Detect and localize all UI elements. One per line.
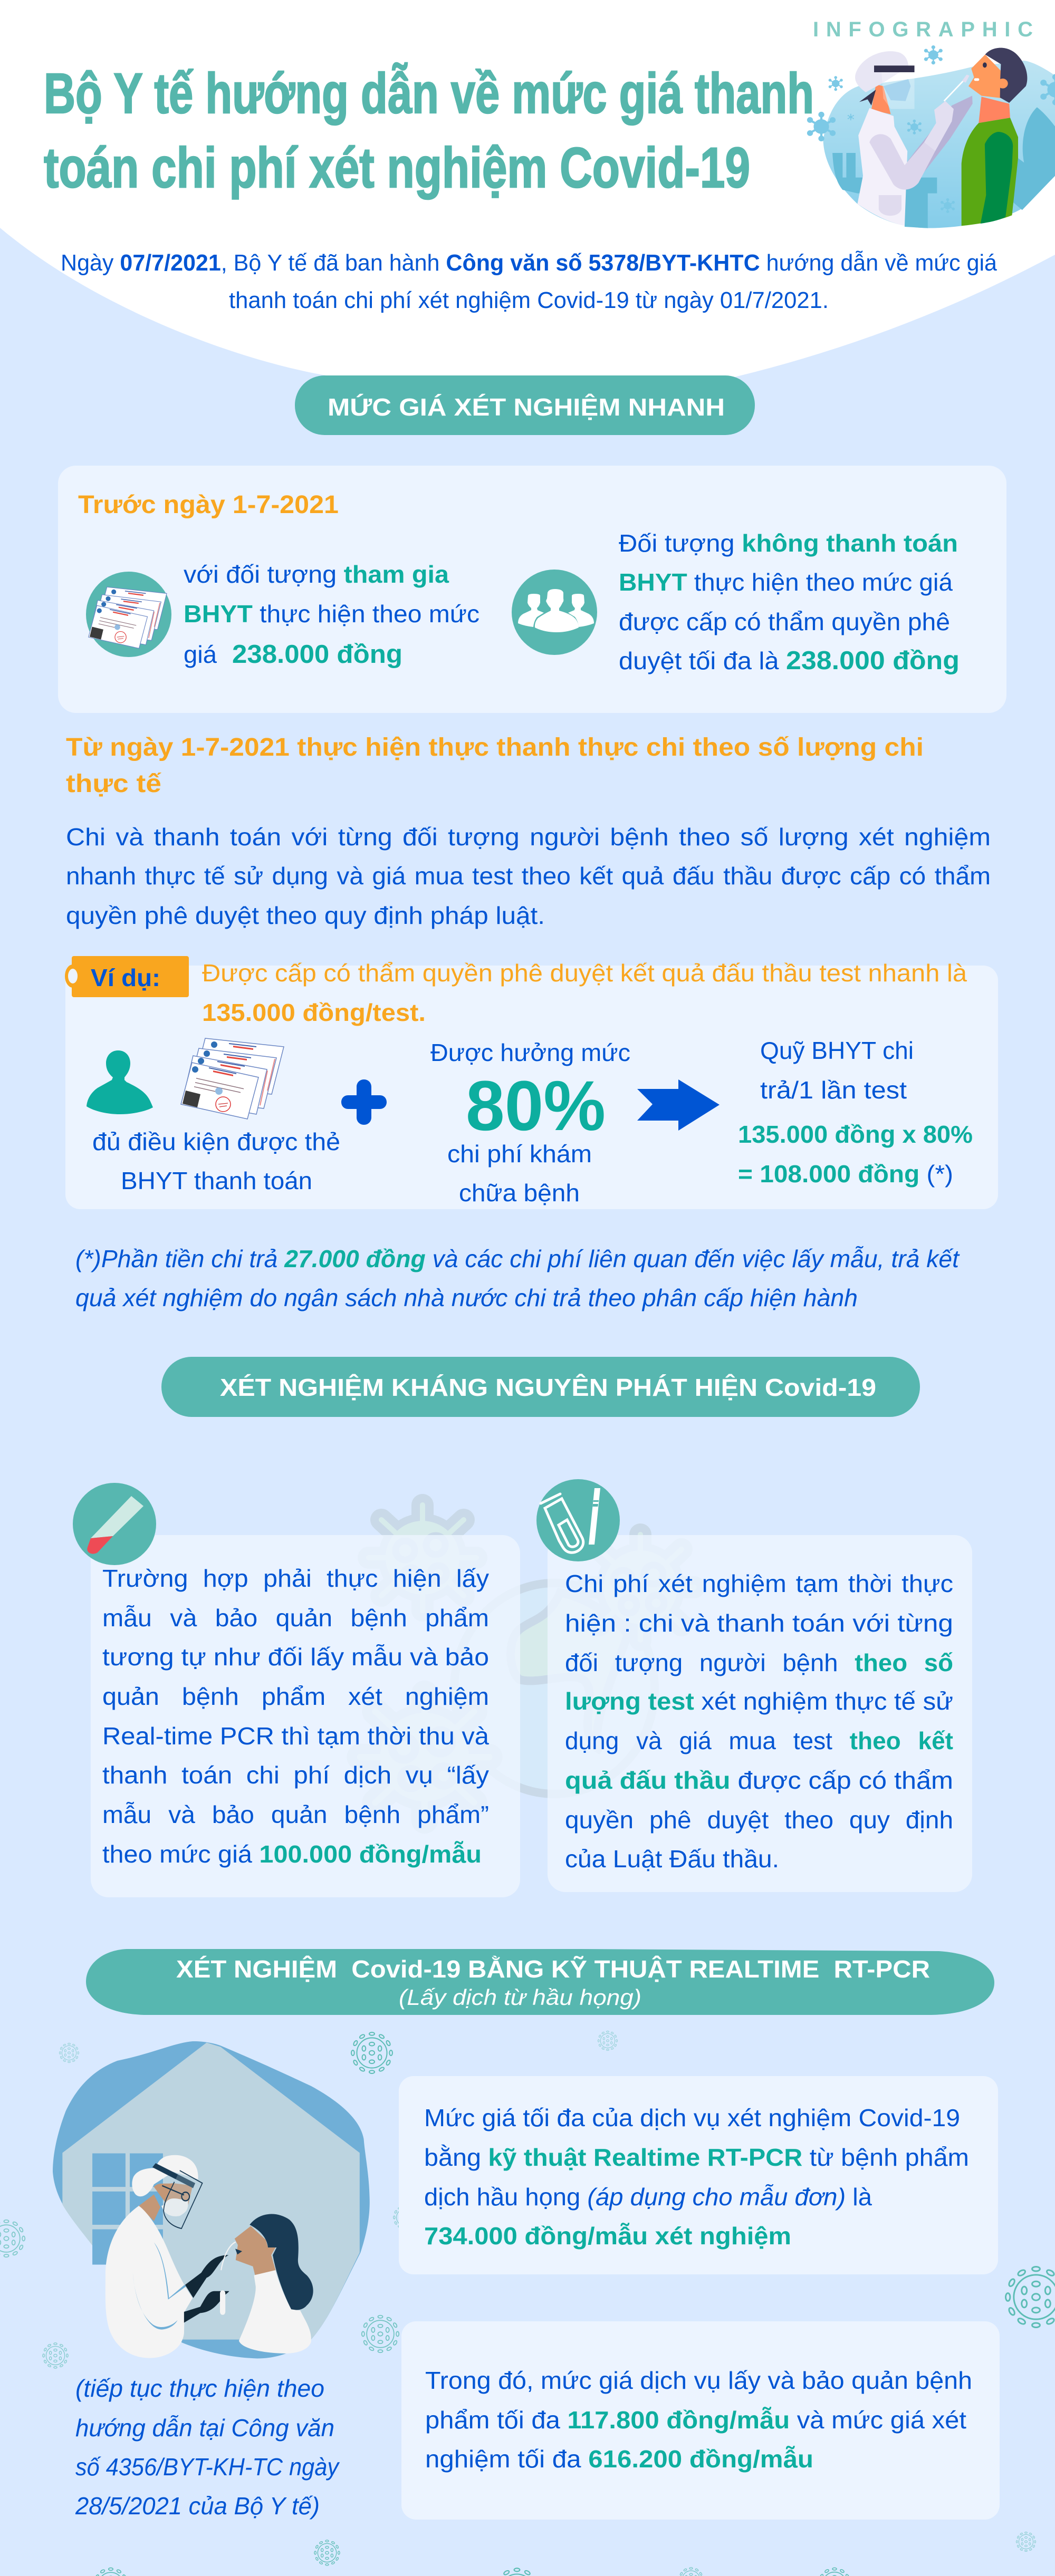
text: sampling cost: thanh toán chi phí dịch vụ “lấy	[102, 1761, 489, 1789]
text: insured patients: với đối tượng tham gia	[184, 561, 449, 588]
text: insured patients	[184, 561, 479, 669]
text: eligible card holder: đủ điều kiện được thẻ	[92, 1128, 340, 1155]
text: uninsured patients: được cấp có thẩm quyền phê	[619, 608, 950, 635]
text: fund pays: Quỹ BHYT chi	[760, 1037, 914, 1064]
text: benefit 80 percent: 80%	[466, 1067, 606, 1145]
arrow	[637, 1079, 720, 1131]
text: fund pays: 135.000 đồng x 80%	[738, 1121, 973, 1148]
text: sampling cost: mẫu và bảo quản bệnh phẩm”	[102, 1801, 489, 1828]
text: temporary test cost: Chi phí xét nghiệm tạm thời thực	[565, 1570, 953, 1597]
icon: blood test tube	[73, 1483, 156, 1565]
faded virus and flask background	[360, 1505, 694, 1820]
text: insured patients: 238.000 đồng	[232, 640, 402, 669]
paragraph: payment rule: nhanh thực tế sử dụng và giá mua test theo kết quả đấu thầu được cấp có thẩm	[66, 862, 991, 890]
text: temporary test cost: hiện : chi và thanh toán với từng	[565, 1609, 953, 1637]
heading pill: realtime RT-PCR: XÉT NGHIỆM Covid-19 BẰNG KỸ THUẬT REALTIME RT-PCR	[176, 1955, 930, 1983]
footnote: (*)Phần tiền chi trả 27.000 đồng và các chi phí liên quan đến việc lấy mẫu, trả kết	[75, 1245, 960, 1272]
text: fund pays: = 108.000 đồng (*)	[738, 1160, 953, 1188]
text: uninsured patients	[619, 529, 960, 675]
panel: before 1-7-2021	[58, 466, 1006, 713]
text: sampling cost: theo mức giá 100.000 đồng/mẫu	[102, 1840, 482, 1868]
heading pill: antigen test	[161, 1357, 920, 1417]
panel: price breakdown	[401, 2321, 1000, 2520]
heading: from 1-7-2021: thực tế	[66, 770, 161, 798]
footnote: quả xét nghiệm do ngân sách nhà nước chi trả theo phân cấp hiện hành	[75, 1284, 858, 1311]
icon: group of people	[512, 570, 597, 655]
text: fund pays: trả/1 lần test	[760, 1076, 907, 1104]
text: temporary test cost: dụng và giá mua test theo kết	[565, 1727, 953, 1754]
panel: left antigen card	[91, 1535, 520, 1897]
text: temporary test cost: quyền phê duyệt theo quy định	[565, 1806, 953, 1834]
text: eligible card holder	[92, 1128, 340, 1194]
intro text	[61, 250, 998, 313]
text: temporary test cost: của Luật Đấu thầu.	[565, 1845, 779, 1873]
text: sampling cost	[102, 1565, 489, 1868]
icon: insurance cards	[86, 572, 171, 657]
text: fund pays	[738, 1037, 973, 1188]
text: uninsured patients: Đối tượng không thanh toán	[619, 529, 958, 557]
panel: price breakdown: nghiệm tối đa 616.200 đồng/mẫu	[425, 2445, 813, 2473]
text: temporary test cost	[565, 1570, 953, 1873]
title: Bộ Y tế hướng dẫn về mức giá thanh	[44, 61, 814, 125]
text: example statement: 135.000 đồng/test.	[202, 999, 426, 1026]
panel: right antigen card	[548, 1535, 972, 1892]
panel: max price	[399, 2076, 998, 2274]
note: continue following document: hướng dẫn tại Công văn	[75, 2414, 334, 2442]
heading: before date: Trước ngày 1-7-2021	[78, 491, 339, 519]
text: benefit 80 percent: chữa bệnh	[459, 1179, 580, 1207]
text: sampling cost: mẫu và bảo quản bệnh phẩm	[102, 1604, 489, 1632]
panel: max price: Mức giá tối đa của dịch vụ xét nghiệm Covid-19	[424, 2104, 960, 2131]
text: eligible card holder: BHYT thanh toán	[121, 1167, 312, 1194]
text: uninsured patients: BHYT thực hiện theo mức giá	[619, 568, 953, 596]
tag: example label: Ví dụ:	[91, 964, 160, 991]
text: benefit 80 percent: Được hưởng mức	[430, 1039, 630, 1066]
text: insured patients: giá	[184, 641, 217, 668]
text: sampling cost: tương tự như đối lấy mẫu và bảo	[102, 1643, 489, 1671]
text: example statement: Được cấp có thẩm quyền phê duyệt kết quả đấu thầu test nhanh là	[202, 959, 967, 987]
heading pill: realtime RT-PCR: (Lấy dịch từ hầu họng)	[399, 1985, 641, 2010]
icon: person	[87, 1050, 153, 1114]
illustration: home sampling	[53, 2041, 370, 2359]
text: benefit 80 percent	[430, 1039, 630, 1207]
text: sampling cost: quản bệnh phẩm xét nghiệm	[102, 1683, 489, 1710]
paragraph: payment rule: Chi và thanh toán với từng đối tượng người bệnh theo số lượng xét nghiệm	[66, 823, 991, 851]
icon: swab tube and strip	[536, 1479, 620, 1561]
title: toán chi phí xét nghiệm Covid-19	[44, 136, 750, 199]
panel: price breakdown: Trong đó, mức giá dịch vụ lấy và bảo quản bệnh	[425, 2367, 972, 2394]
icon: insurance cards	[181, 1038, 284, 1119]
panel: example	[65, 956, 998, 1209]
tag: example label	[65, 956, 189, 997]
heading: from 1-7-2021	[66, 734, 924, 798]
heading: from 1-7-2021: Từ ngày 1-7-2021 thực hiện thực thanh thực chi theo số lượng chi	[66, 734, 924, 761]
footnote	[75, 1245, 960, 1311]
heading pill: antigen test: XÉT NGHIỆM KHÁNG NGUYÊN PHÁT HIỆN Covid-19	[220, 1374, 876, 1401]
header white arc background	[0, 0, 1055, 398]
heading pill: realtime RT-PCR	[86, 1949, 994, 2015]
paragraph: payment rule	[66, 823, 991, 929]
decorative viruses	[0, 2031, 1055, 2576]
note: continue following document: 28/5/2021 của Bộ Y tế)	[75, 2492, 320, 2520]
text: temporary test cost: đối tượng người bệnh theo số	[565, 1649, 953, 1676]
text: sampling cost: Trường hợp phải thực hiện lấy	[102, 1565, 489, 1592]
icon: plus	[341, 1079, 387, 1125]
panel: max price: 734.000 đồng/mẫu xét nghiệm	[424, 2222, 791, 2250]
note: continue following document: (tiếp tục thực hiện theo	[75, 2375, 324, 2402]
heading pill: rapid test prices: MỨC GIÁ XÉT NGHIỆM NHANH	[328, 393, 725, 421]
label: INFOGRAPHIC: INFOGRAPHIC	[813, 18, 1033, 41]
text: temporary test cost: lượng test xét nghiệm thực tế sử	[565, 1687, 953, 1715]
paragraph: payment rule: quyền phê duyệt theo quy định pháp luật.	[66, 902, 545, 929]
illustration: nurse swabbing a patient	[807, 45, 1055, 228]
intro text: Ngày 07/7/2021, Bộ Y tế đã ban hành Công văn số 5378/BYT-KHTC hướng dẫn về mức giá	[61, 250, 998, 276]
text: example statement	[202, 959, 967, 1026]
note: continue following document: số 4356/BYT-KH-TC ngày	[75, 2453, 340, 2481]
text: sampling cost: Real-time PCR thì tạm thời thu và	[102, 1722, 489, 1750]
heading pill: rapid test prices	[295, 375, 755, 435]
panel: price breakdown: phẩm tối đa 117.800 đồng/mẫu và mức giá xét	[425, 2406, 966, 2434]
text: temporary test cost: quả đấu thầu được cấp có thẩm	[565, 1767, 953, 1794]
intro text: thanh toán chi phí xét nghiệm Covid-19 từ ngày 01/7/2021.	[229, 287, 829, 313]
note: continue following document	[75, 2375, 340, 2520]
panel: max price: dịch hầu họng (áp dụng cho mẫu đơn) là	[424, 2183, 872, 2211]
text: benefit 80 percent: chi phí khám	[447, 1140, 592, 1168]
panel: max price: bằng kỹ thuật Realtime RT-PCR từ bệnh phẩm	[424, 2144, 969, 2171]
text: insured patients: BHYT thực hiện theo mức	[184, 600, 479, 628]
text: uninsured patients: duyệt tối đa là 238.000 đồng	[619, 647, 960, 675]
title	[44, 61, 814, 199]
